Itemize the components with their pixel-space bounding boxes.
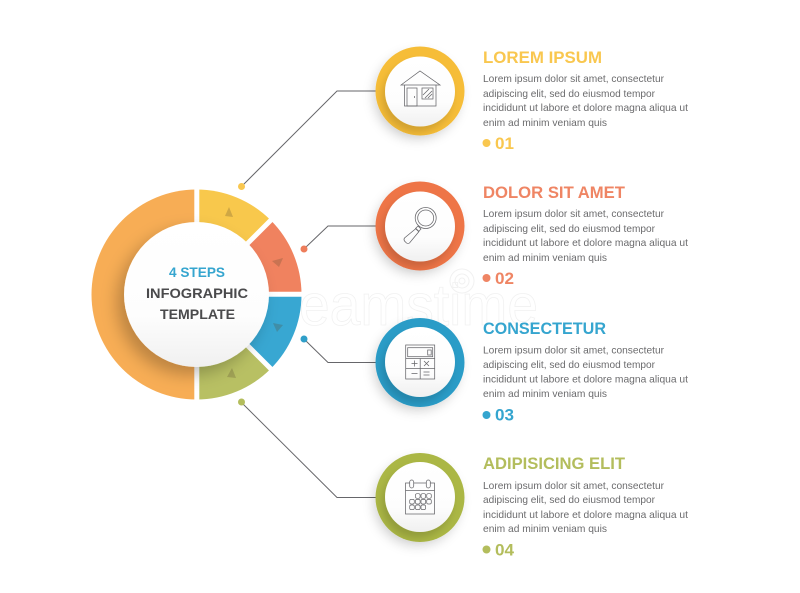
- connector: step 4: [238, 398, 378, 498]
- segment: coral: [196, 220, 302, 294]
- step 4 badge: [376, 453, 464, 542]
- step 3 text: [482, 320, 688, 424]
- step 4 text: [482, 455, 688, 560]
- segment: green: [196, 294, 271, 400]
- step 2 badge: [376, 182, 464, 270]
- step 3 text: enim ad minim veniam quis: [483, 388, 607, 400]
- icon: calendar: [406, 480, 434, 514]
- step 2 text: [482, 184, 688, 288]
- step 1 text: adipiscing elit, sed do eiusmod tempor: [483, 88, 655, 100]
- center circle: [124, 222, 269, 367]
- icon: house: [401, 71, 440, 106]
- step 3 text: CONSECTETUR: [483, 320, 606, 338]
- watermark: dreamstime: [250, 273, 538, 338]
- step 4 text: Lorem ipsum dolor sit amet, consectetur: [483, 480, 664, 492]
- step 2 text: DOLOR SIT AMET: [483, 184, 625, 202]
- step 4 text: incididunt ut labore et dolore magna aliqua ut: [483, 509, 688, 521]
- step 4 text: adipiscing elit, sed do eiusmod tempor: [483, 494, 655, 506]
- pointer triangles: [225, 207, 283, 378]
- icon: magnifier: [404, 208, 436, 244]
- step 1 text: [482, 49, 688, 153]
- step 2 text: adipiscing elit, sed do eiusmod tempor: [483, 223, 655, 235]
- step 3 text: 03: [495, 406, 514, 424]
- step 3 text: adipiscing elit, sed do eiusmod tempor: [483, 359, 655, 371]
- step 4 text: 04: [495, 542, 515, 560]
- icon: calculator: [406, 345, 435, 379]
- segment gaps: [196, 186, 305, 403]
- connector: step 1: [238, 91, 378, 190]
- step 2 text: enim ad minim veniam quis: [483, 252, 607, 264]
- center title: INFOGRAPHIC: [146, 285, 248, 301]
- center title: 4 STEPS: [169, 264, 225, 280]
- step 4 text: enim ad minim veniam quis: [483, 523, 607, 535]
- step 1 text: enim ad minim veniam quis: [483, 117, 607, 129]
- segment: orange: [92, 190, 196, 400]
- segment: yellow: [196, 190, 271, 294]
- connector: step 3: [300, 336, 378, 362]
- step 2 text: incididunt ut labore et dolore magna aliqua ut: [483, 237, 688, 249]
- step 3 text: incididunt ut labore et dolore magna aliqua ut: [483, 374, 688, 386]
- step 4 text: ADIPISICING ELIT: [483, 455, 625, 473]
- step 3 text: Lorem ipsum dolor sit amet, consectetur: [483, 344, 664, 356]
- donut chart: [92, 186, 305, 403]
- center title: TEMPLATE: [160, 306, 235, 322]
- step 1 badge: [376, 46, 464, 136]
- step 1 text: Lorem ipsum dolor sit amet, consectetur: [483, 73, 664, 85]
- step 1 text: 01: [495, 135, 514, 153]
- center title: [146, 264, 248, 322]
- step 3 badge: [376, 318, 464, 407]
- segment: blue: [196, 294, 302, 369]
- step 2 text: Lorem ipsum dolor sit amet, consectetur: [483, 208, 664, 220]
- step 1 text: LOREM IPSUM: [483, 49, 602, 67]
- connector: step 2: [300, 226, 378, 252]
- step 2 text: 02: [495, 270, 514, 288]
- step 1 text: incididunt ut labore et dolore magna aliqua ut: [483, 102, 688, 114]
